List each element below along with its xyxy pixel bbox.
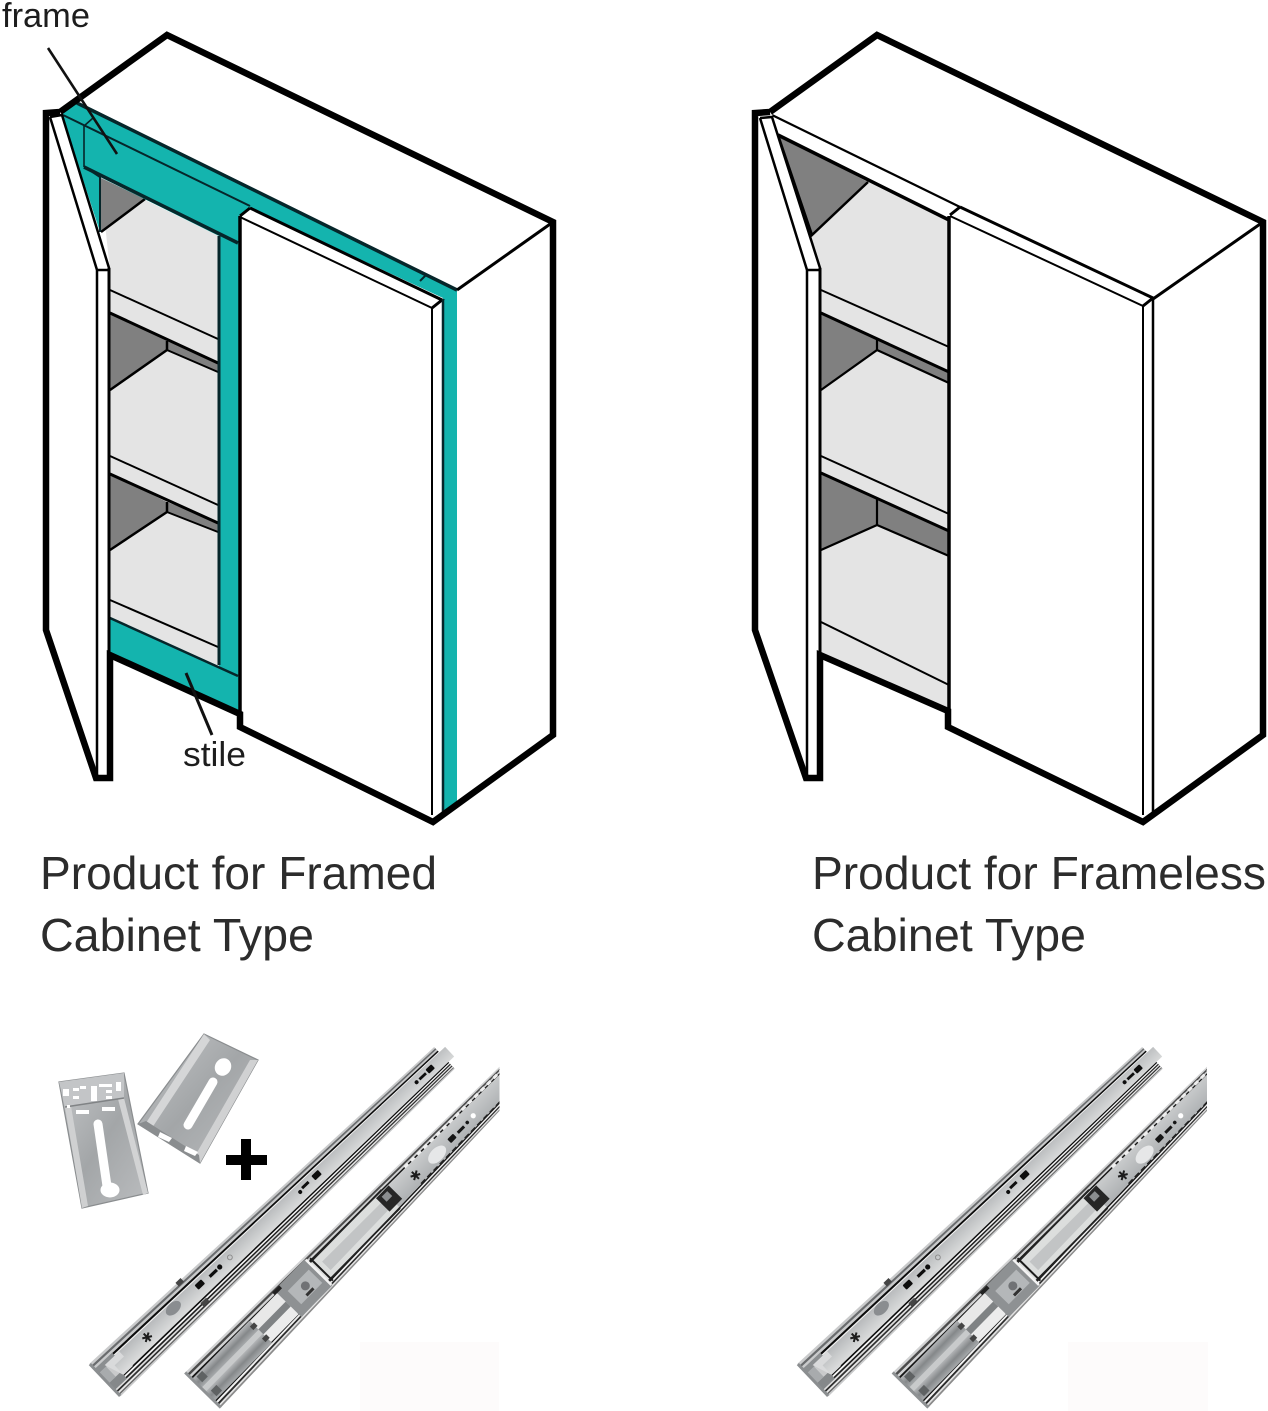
heading: frameless cabinet type: Product for Frameless (812, 847, 1266, 899)
cabinet body (46, 35, 553, 822)
plus sign (226, 1139, 267, 1180)
right door (949, 207, 1153, 817)
rear mounting bracket back (138, 1034, 258, 1163)
heading: framed cabinet type: Product for Framed (40, 847, 437, 899)
faint photo patch right (1068, 1342, 1208, 1411)
top right edge line (1153, 222, 1263, 299)
top right edge line (457, 222, 553, 290)
panel: framed cabinet (2, 0, 553, 822)
panel: frameless cabinet (755, 35, 1263, 822)
thick cabinet outline (46, 35, 553, 822)
left open door (755, 113, 820, 778)
open interior with shelves (100, 178, 219, 668)
heading: frameless cabinet type: Cabinet Type (812, 909, 1086, 961)
stile label (183, 673, 246, 774)
teal face frame (62, 103, 457, 815)
left open door (46, 113, 109, 778)
heading: framed cabinet type: Cabinet Type (40, 909, 314, 961)
left drawer rail closed (90, 1036, 466, 1396)
right drawer rail open (893, 1055, 1240, 1408)
rear mounting bracket front (59, 1073, 148, 1208)
faint photo patch left (360, 1342, 499, 1411)
open interior with shelves (778, 135, 949, 713)
frame label (2, 0, 117, 154)
cabinet body (755, 35, 1263, 822)
top front edge (772, 115, 960, 207)
stile label: stile (183, 736, 246, 774)
thick cabinet outline (755, 35, 1263, 822)
left drawer rail open (185, 1055, 533, 1408)
right door (240, 208, 443, 817)
right drawer rail closed (798, 1036, 1174, 1396)
